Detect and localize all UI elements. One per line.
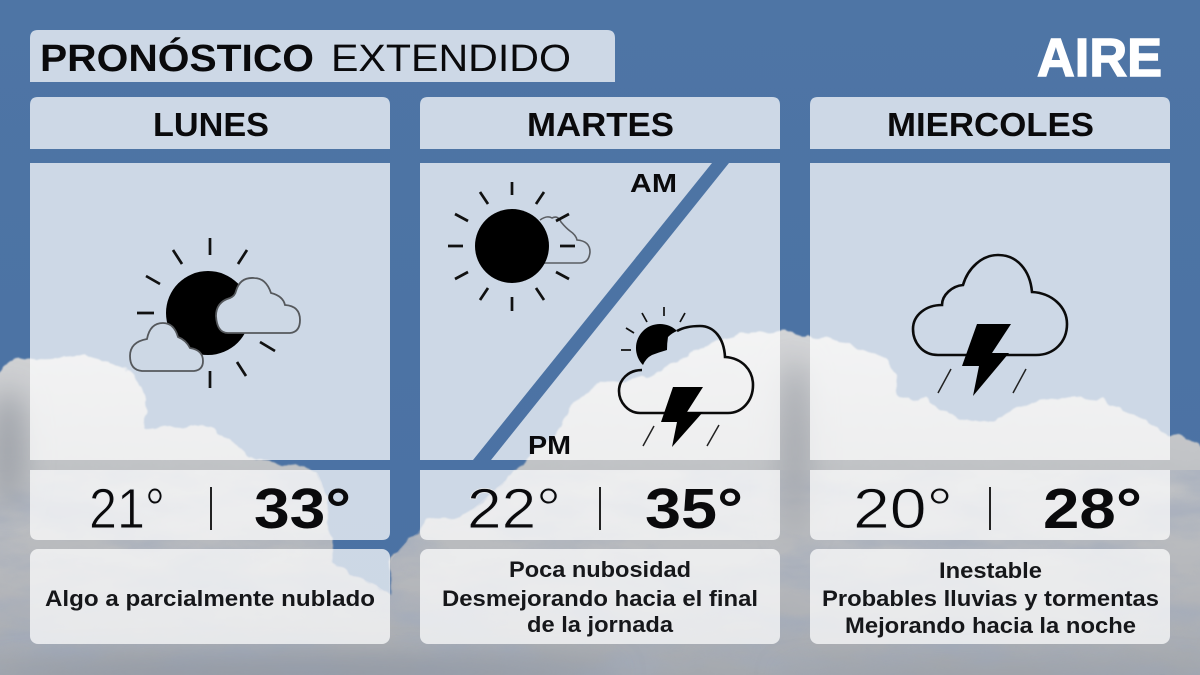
heading: martes: MARTES — [527, 106, 674, 143]
temperatures: lunes: 33° — [254, 477, 351, 541]
description: miercoles: Probables lluvias y tormentas — [822, 586, 1159, 611]
icon panel: miercoles — [810, 163, 1170, 460]
temperatures: lunes: 21° — [89, 477, 165, 541]
heading: miercoles: MIERCOLES — [887, 106, 1094, 143]
heading: lunes: LUNES — [153, 106, 269, 143]
title text light: EXTENDIDO — [331, 38, 571, 80]
description: miercoles: Mejorando hacia la noche — [845, 613, 1136, 638]
description: miercoles: Inestable — [939, 558, 1042, 583]
panel: lunes — [30, 97, 390, 644]
title bar — [30, 30, 615, 82]
icon: sun behind storm cloud — [619, 307, 753, 447]
description: martes — [420, 549, 780, 644]
icon panel: lunes — [30, 163, 390, 460]
temperatures: martes: 22° — [467, 477, 561, 541]
heading: lunes — [30, 97, 390, 149]
heading: martes — [420, 97, 780, 149]
description: miercoles — [810, 549, 1170, 644]
temperatures: martes: 35° — [645, 477, 743, 541]
icon: sun with two clouds — [130, 238, 300, 388]
description: lunes: Algo a parcialmente nublado — [45, 586, 375, 611]
temperatures: miercoles: 28° — [1043, 477, 1142, 541]
heading: miercoles — [810, 97, 1170, 149]
icon panel: am half — [420, 163, 712, 460]
description: martes: Desmejorando hacia el final — [442, 586, 758, 611]
temperatures: miercoles — [810, 470, 1170, 541]
icon panel: pm half — [491, 163, 780, 460]
temperatures: lunes — [30, 470, 390, 541]
description: martes: de la jornada — [527, 612, 674, 637]
background: clouds — [0, 330, 1200, 675]
label: AM: AM — [630, 168, 677, 198]
logo: AIRE: AIRE — [1037, 28, 1162, 88]
label: PM: PM — [528, 430, 571, 460]
icon: storm cloud — [913, 255, 1067, 396]
description: martes: Poca nubosidad — [509, 557, 691, 582]
panel: martes — [420, 97, 780, 644]
description: lunes — [30, 549, 390, 644]
temperatures: miercoles: 20° — [853, 477, 953, 541]
temperatures: martes — [420, 470, 780, 541]
panel: miercoles — [810, 97, 1170, 644]
title text bold: PRONÓSTICO — [40, 36, 314, 80]
icon: sun with small cloud — [448, 182, 590, 311]
